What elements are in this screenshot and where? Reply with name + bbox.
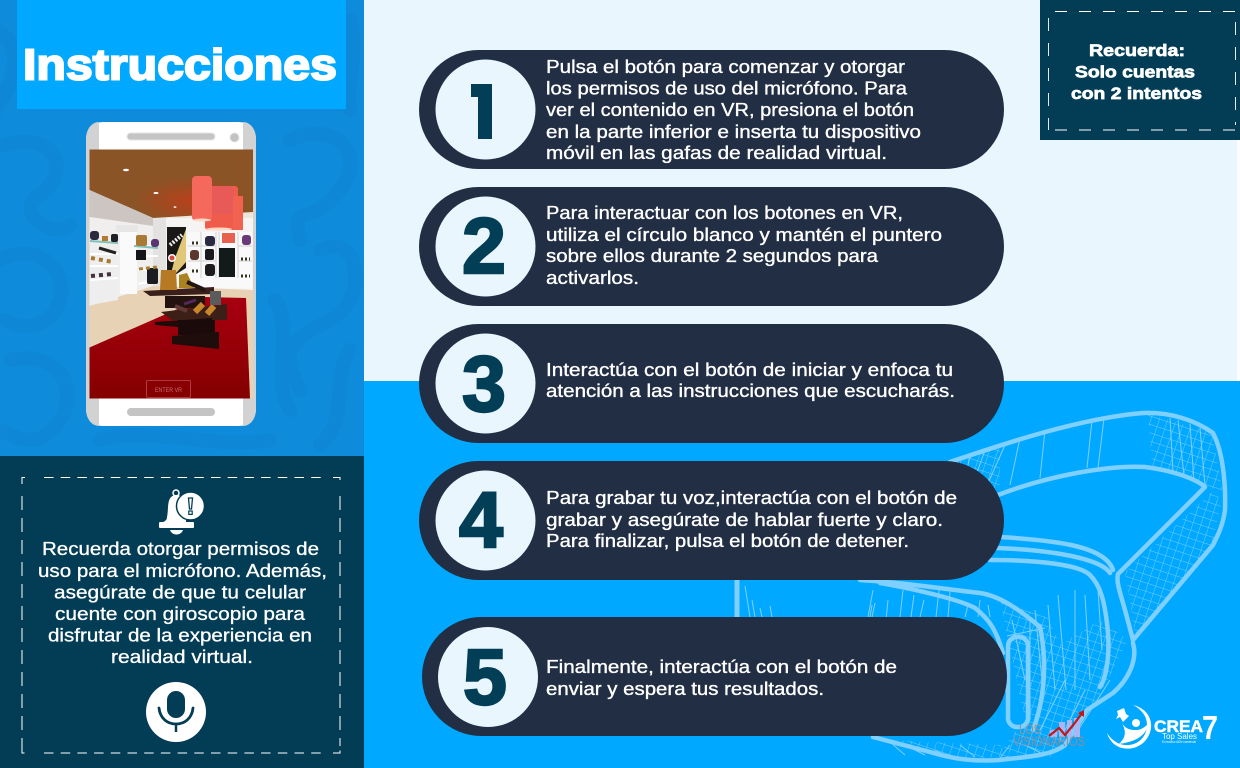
floor bbox=[90, 286, 253, 398]
illustration: VR headset sketch bbox=[737, 413, 1225, 761]
step 3 bbox=[419, 324, 1004, 443]
step 2 text: utiliza el círculo blanco y mantén el puntero bbox=[546, 225, 942, 245]
headband bbox=[950, 413, 1225, 640]
step 4 text bbox=[546, 488, 957, 551]
reminder text: uso para el micrófono. Además, bbox=[38, 561, 327, 581]
number 1 bbox=[471, 84, 492, 139]
step 5 text: enviar y espera tus resultados. bbox=[546, 679, 824, 699]
icon: microphone bbox=[146, 682, 206, 742]
icon: alert bell bbox=[159, 490, 204, 534]
left shelves bbox=[90, 225, 159, 305]
logo: Crea7 Top Sales: 7 bbox=[1202, 709, 1218, 746]
logo: Crea7 Top Sales bbox=[1107, 705, 1218, 749]
step 4 text: Para grabar tu voz,interactúa con el botón de bbox=[546, 488, 957, 508]
title banner bbox=[17, 0, 346, 109]
number 3: 3 bbox=[462, 339, 506, 428]
background: light upper area bbox=[364, 0, 1240, 381]
ceiling spots bbox=[123, 169, 129, 171]
step 1 text: los permisos de uso del micrófono. Para bbox=[546, 78, 908, 98]
black friday poster bbox=[167, 227, 186, 281]
attempts text bbox=[1071, 41, 1202, 103]
step 3 text: Interactúa con el botón de iniciar y enfoca tu bbox=[546, 360, 953, 380]
step 1 text: Pulsa el botón para comenzar y otorgar bbox=[546, 57, 905, 77]
step 2 bbox=[419, 187, 1004, 306]
step 1 text: móvil en las gafas de realidad virtual. bbox=[546, 143, 887, 163]
background: blue lower area bbox=[364, 381, 1240, 768]
step 1 text: en la parte inferior e inserta tu dispositivo bbox=[546, 122, 921, 142]
phone screen: VR shoe store bbox=[90, 150, 253, 398]
step 2 text bbox=[546, 203, 942, 288]
walls bbox=[90, 190, 153, 226]
logo: Crea7 Top Sales: CREA bbox=[1154, 717, 1203, 736]
step 3 text: atención a las instrucciones que escucharás. bbox=[546, 381, 955, 401]
number 5: 5 bbox=[463, 632, 507, 721]
enter vr button: ENTER VR bbox=[155, 388, 183, 394]
step 2 text: Para interactuar con los botones en VR, bbox=[546, 203, 903, 223]
reminder text: asegúrate de que tu celular bbox=[54, 582, 306, 602]
step 4 bbox=[419, 461, 1004, 580]
step 2 text: sobre ellos durante 2 segundos para bbox=[546, 246, 879, 266]
reminder text: disfrutar de la experiencia en bbox=[48, 626, 312, 646]
display table bbox=[143, 270, 227, 349]
logo: Los Visionarios: LOS bbox=[1019, 721, 1041, 737]
step 4 text: Para finalizar, pulsa el botón de detener. bbox=[546, 531, 909, 551]
step 3 text bbox=[546, 360, 955, 401]
logo: Crea7 Top Sales: El recurso ADN comercial bbox=[1162, 740, 1196, 744]
step 2 text: activarlos. bbox=[546, 268, 639, 288]
number 2: 2 bbox=[462, 201, 506, 290]
straps bbox=[1000, 537, 1113, 570]
red lamps bbox=[192, 176, 243, 230]
ceiling bbox=[90, 150, 253, 218]
logo: Los Visionarios: VISIONARIOS bbox=[1013, 733, 1085, 749]
attempts text: con 2 intentos bbox=[1071, 84, 1202, 103]
reminder text: cuente con giroscopio para bbox=[55, 604, 306, 624]
step 5 bbox=[422, 617, 1007, 736]
logo: Crea7 Top Sales: Top Sales bbox=[1162, 732, 1197, 741]
step 1 bbox=[419, 50, 1004, 169]
phone mockup bbox=[86, 122, 256, 426]
panel: left patterned background bbox=[0, 0, 364, 456]
attempts text: Solo cuentas bbox=[1075, 62, 1195, 82]
panel: microphone reminder bbox=[0, 456, 364, 768]
carpet bbox=[90, 297, 250, 398]
reminder text: realidad virtual. bbox=[111, 647, 253, 667]
reminder text: Recuerda otorgar permisos de bbox=[42, 539, 319, 559]
reminder text bbox=[38, 539, 327, 667]
goggle body bbox=[860, 580, 1044, 730]
step 1 text: ver el contenido en VR, presiona el botón bbox=[546, 100, 914, 120]
title: Instrucciones bbox=[23, 40, 337, 90]
panel: attempts reminder bbox=[1040, 0, 1240, 381]
enter vr button bbox=[146, 380, 190, 398]
step 5 text: Finalmente, interactúa con el botón de bbox=[546, 657, 897, 677]
step 5 text bbox=[546, 657, 897, 699]
step 4 text: grabar y asegúrate de hablar fuerte y claro. bbox=[546, 510, 943, 530]
dashed frame bbox=[22, 478, 340, 753]
logo: Los Visionarios bbox=[1013, 710, 1085, 749]
attempts text: Recuerda: bbox=[1089, 41, 1185, 60]
back shelves bbox=[188, 232, 252, 288]
number 4: 4 bbox=[459, 475, 503, 564]
step 1 text bbox=[546, 57, 921, 163]
